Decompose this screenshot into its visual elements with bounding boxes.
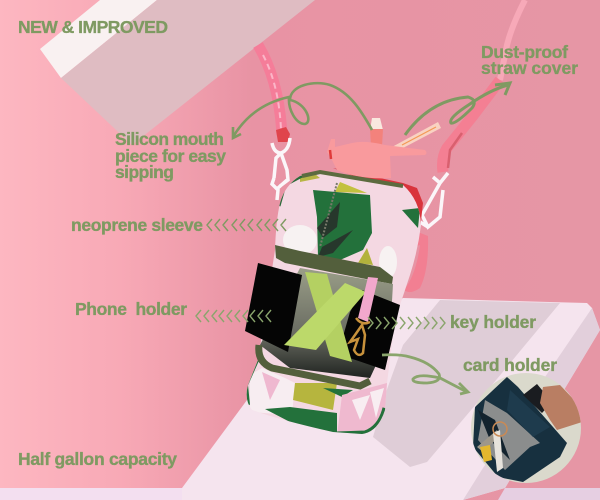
chevrons: neoprene sleeve — [207, 219, 286, 231]
label: dust-proof straw cover: Dust-proof — [481, 42, 568, 62]
upper box: white edge — [40, 0, 157, 78]
title: NEW & IMPROVED — [18, 17, 168, 37]
sleeve: lower band — [259, 345, 370, 386]
label: key holder: key holder — [450, 312, 536, 332]
arrow: straw cover — [405, 83, 510, 135]
chevrons: key holder — [368, 317, 445, 329]
label: silicon mouth piece: sipping — [115, 162, 174, 182]
bottle: flip cover — [392, 122, 441, 148]
label: card holder: card holder — [463, 355, 557, 375]
label: phone holder: Phone holder — [75, 299, 187, 319]
sleeve: clear pocket — [260, 268, 393, 378]
chevrons: phone holder — [196, 310, 271, 322]
phone: left — [245, 263, 302, 352]
strap: right — [442, 0, 525, 172]
webbing: lime cross — [284, 272, 366, 362]
strap loop: right — [404, 232, 428, 292]
label: silicon mouth piece: piece for easy — [115, 146, 226, 166]
label: neoprene sleeve: neoprene sleeve — [71, 215, 203, 235]
lower box: platform — [0, 298, 600, 500]
label: silicon mouth piece — [115, 129, 226, 182]
strap: left — [258, 45, 290, 142]
bottle: lid — [327, 139, 426, 178]
arrow: card holder — [382, 355, 468, 394]
label: dust-proof straw cover — [481, 42, 578, 78]
label: half gallon capacity: Half gallon capacity — [18, 449, 177, 469]
sleeve: upper band — [275, 245, 393, 284]
phone: right — [338, 290, 400, 370]
clip: left — [272, 138, 290, 200]
upper box: shadow face — [61, 0, 315, 145]
arrow: silicon mouth piece — [233, 83, 372, 138]
bottle: red body behind sleeve — [333, 168, 423, 230]
sleeve: collar — [302, 172, 403, 186]
bottle: neoprene sleeve — [246, 174, 421, 434]
label: silicon mouth piece: Silicon mouth — [115, 129, 224, 149]
key clip: pink strap and gold hook — [350, 277, 378, 355]
label: dust-proof straw cover: straw cover — [481, 58, 578, 78]
bottle: straw — [370, 118, 383, 147]
photo: card holder pouch — [470, 372, 584, 484]
clip: right — [420, 173, 448, 227]
